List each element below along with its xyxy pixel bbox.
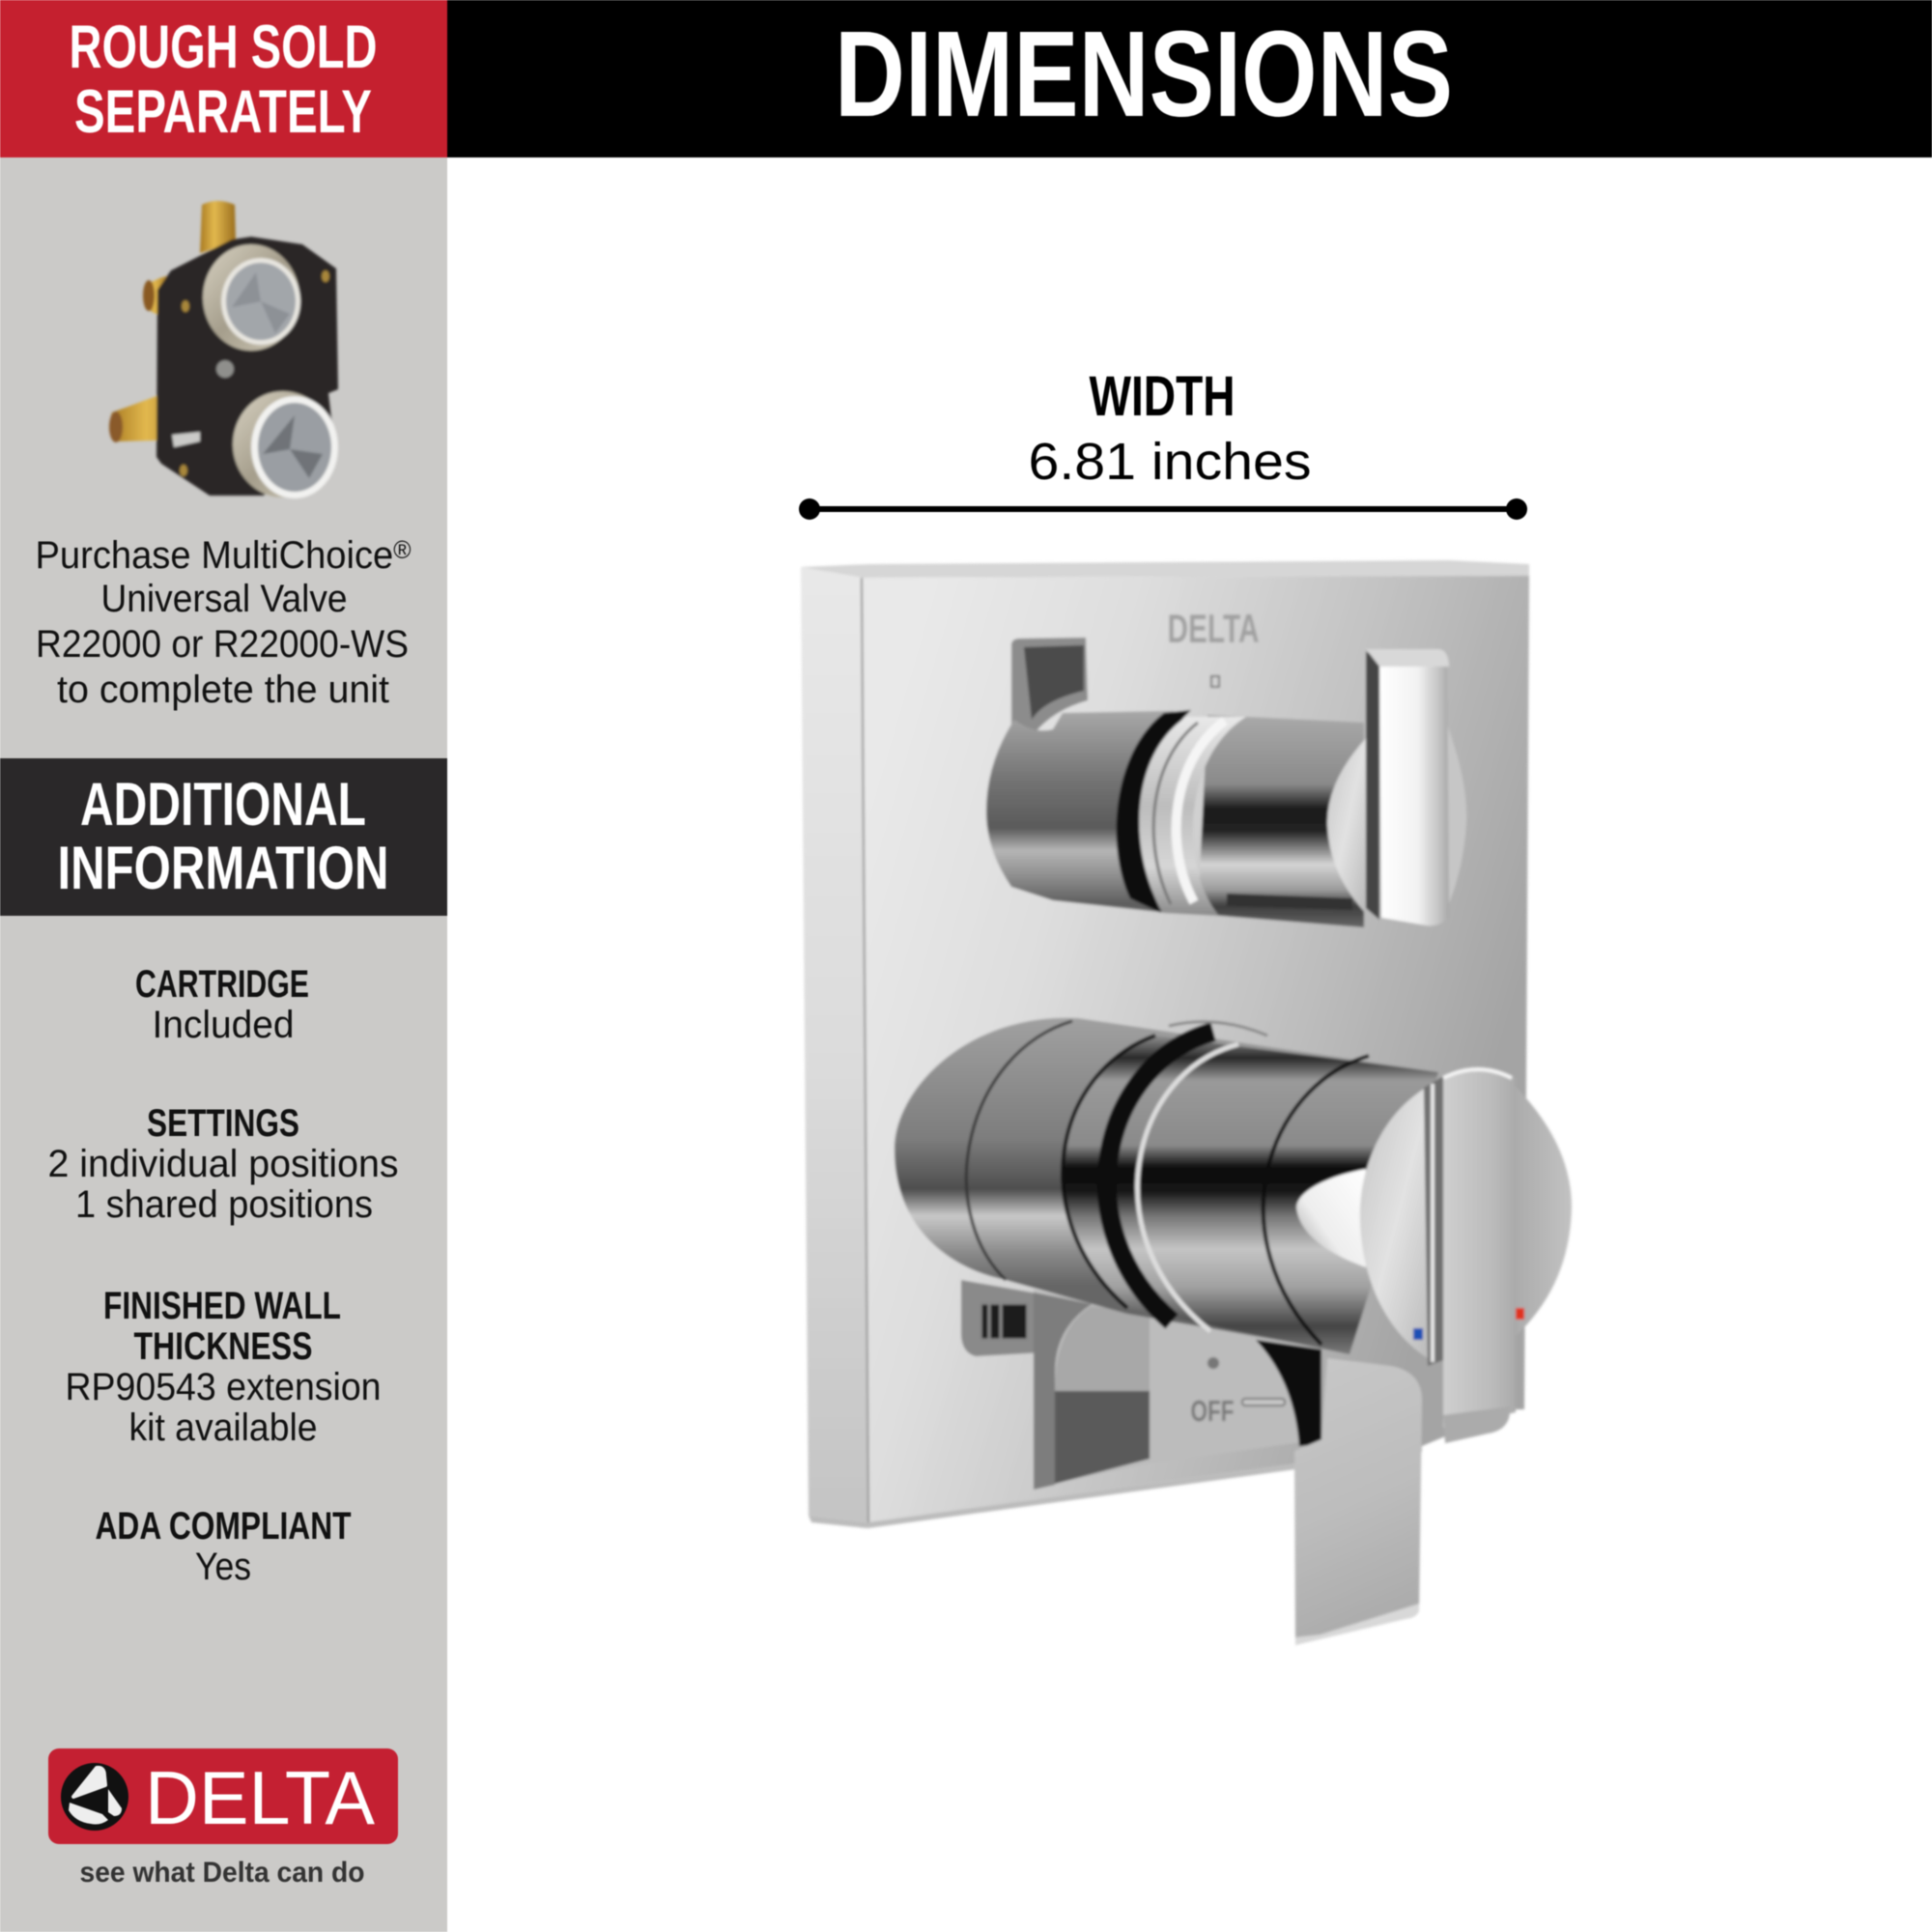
dimension label: width: WIDTH: [1090, 365, 1235, 428]
heading: additional information: [0, 758, 447, 916]
header: dimensions title: DIMENSIONS: [835, 6, 1453, 142]
trim plate: [801, 560, 1529, 1528]
upper bracket inset: [1024, 645, 1084, 720]
lower handle band: [1443, 1070, 1516, 1428]
product: shower trim faucet: [801, 560, 1572, 1645]
text: purchase valve note: R22000 or R22000-WS: [36, 623, 409, 666]
lower barrel: [1063, 1036, 1438, 1354]
info: settings: 2 individual positions: [48, 1143, 398, 1185]
upper bracket: [1011, 638, 1088, 734]
upper left brass pipe: [145, 276, 170, 316]
black mounting plate: [156, 237, 338, 496]
text: purchase valve note: ®: [393, 535, 412, 564]
copper pipe end: [143, 280, 155, 311]
off indicator: [1242, 1399, 1285, 1406]
diverter position mark: [1211, 676, 1219, 687]
top brass pipe: [200, 201, 236, 253]
header: rough sold separately: [0, 0, 447, 157]
upper handle right disc: [1447, 724, 1466, 908]
lower grille slots: [980, 1303, 1028, 1340]
bracket inner light circle: [1055, 1306, 1150, 1391]
bracket left band: [1034, 1293, 1092, 1490]
header: dimensions title: [447, 0, 1932, 157]
brand logo: [48, 1748, 398, 1844]
dimension label: width: 6.81 inches: [1028, 433, 1312, 491]
heading: additional information: INFORMATION: [58, 835, 388, 902]
lever handle: [1294, 1358, 1422, 1645]
upper handle lens: [1327, 737, 1367, 915]
text: purchase valve note: Universal Valve: [100, 578, 348, 620]
handle highlight: [1431, 1084, 1435, 1362]
info: ada compliant: ADA COMPLIANT: [95, 1505, 352, 1548]
dimension label: width: [1028, 365, 1312, 491]
lower handle right disc: [1507, 1078, 1572, 1335]
header: rough sold separately: SEPARATELY: [74, 78, 372, 146]
upper black ring: [1117, 710, 1191, 913]
info: settings: SETTINGS: [147, 1102, 299, 1145]
info: finished wall thickness: [66, 1285, 381, 1449]
info: ada compliant: Yes: [195, 1546, 251, 1588]
lower barrel grooves: [966, 1021, 1369, 1345]
info: finished wall thickness: RP90543 extension: [66, 1366, 381, 1408]
info: ada compliant: [95, 1505, 352, 1588]
upper ring highlight: [1177, 721, 1225, 902]
center bolt: [216, 360, 234, 378]
lower glare cone: [1296, 1169, 1366, 1267]
text: purchase valve note: [35, 534, 412, 711]
info: finished wall thickness: kit available: [129, 1406, 317, 1449]
lower handle lens: [1360, 1084, 1433, 1361]
upper chrome ring: [1139, 717, 1246, 916]
bracket black swoosh: [1256, 1340, 1321, 1446]
red hot marker: [1516, 1308, 1524, 1320]
upper barrel bottom beads: [1227, 894, 1352, 910]
upper valve socket: [203, 244, 300, 351]
lower body cap cylinder: [895, 1018, 1438, 1352]
logo tagline: see what Delta can do: [79, 1857, 365, 1889]
lower handle center strip: [1424, 1076, 1443, 1366]
lower bracket chrome panel: [1034, 1290, 1321, 1488]
info: finished wall thickness: THICKNESS: [133, 1325, 313, 1368]
lower handle top arc: [1443, 1069, 1512, 1078]
sidebar background: [0, 0, 447, 1932]
heading: additional information: ADDITIONAL: [80, 771, 366, 838]
info: settings: [48, 1102, 398, 1226]
dimension arrow: width line: [799, 498, 1527, 520]
header: rough sold separately: ROUGH SOLD: [70, 14, 377, 81]
off label: OFF: [1190, 1394, 1235, 1428]
lower valve socket: [233, 391, 338, 498]
mounting slot: [172, 432, 200, 447]
info: cartridge: [135, 963, 309, 1046]
lever bevel: [1295, 1604, 1419, 1645]
bracket inner dark panel: [1055, 1391, 1150, 1484]
info: settings: 1 shared positions: [75, 1183, 373, 1226]
off dot: [1208, 1357, 1219, 1369]
info: finished wall thickness: FINISHED WALL: [103, 1285, 341, 1327]
upper barrel: [1198, 715, 1364, 927]
upper handle side strip: [1366, 651, 1379, 920]
upper handle blade cap: [1366, 649, 1449, 667]
plate logo text: DELTA: [1167, 606, 1260, 651]
lower copper pipe end: [109, 412, 123, 442]
mounting holes: [180, 270, 329, 476]
icon: rough-in valve: [109, 201, 338, 498]
upper handle blade: [1379, 653, 1449, 925]
lower handle band lip: [1443, 1406, 1510, 1443]
text: purchase valve note: to complete the unit: [57, 668, 389, 711]
logo mark: [61, 1763, 128, 1831]
lower left brass pipe: [110, 396, 200, 441]
info: cartridge: Included: [153, 1004, 294, 1046]
blue cold marker: [1413, 1328, 1423, 1340]
upper ring dark line: [1153, 723, 1198, 904]
text: purchase valve note: Purchase MultiChoice: [35, 534, 412, 577]
lower grille bracket: [961, 1280, 1043, 1356]
info: cartridge: CARTRIDGE: [135, 963, 309, 1006]
brand logo: DELTA: [145, 1755, 375, 1840]
upper left cylinder: [986, 711, 1174, 913]
